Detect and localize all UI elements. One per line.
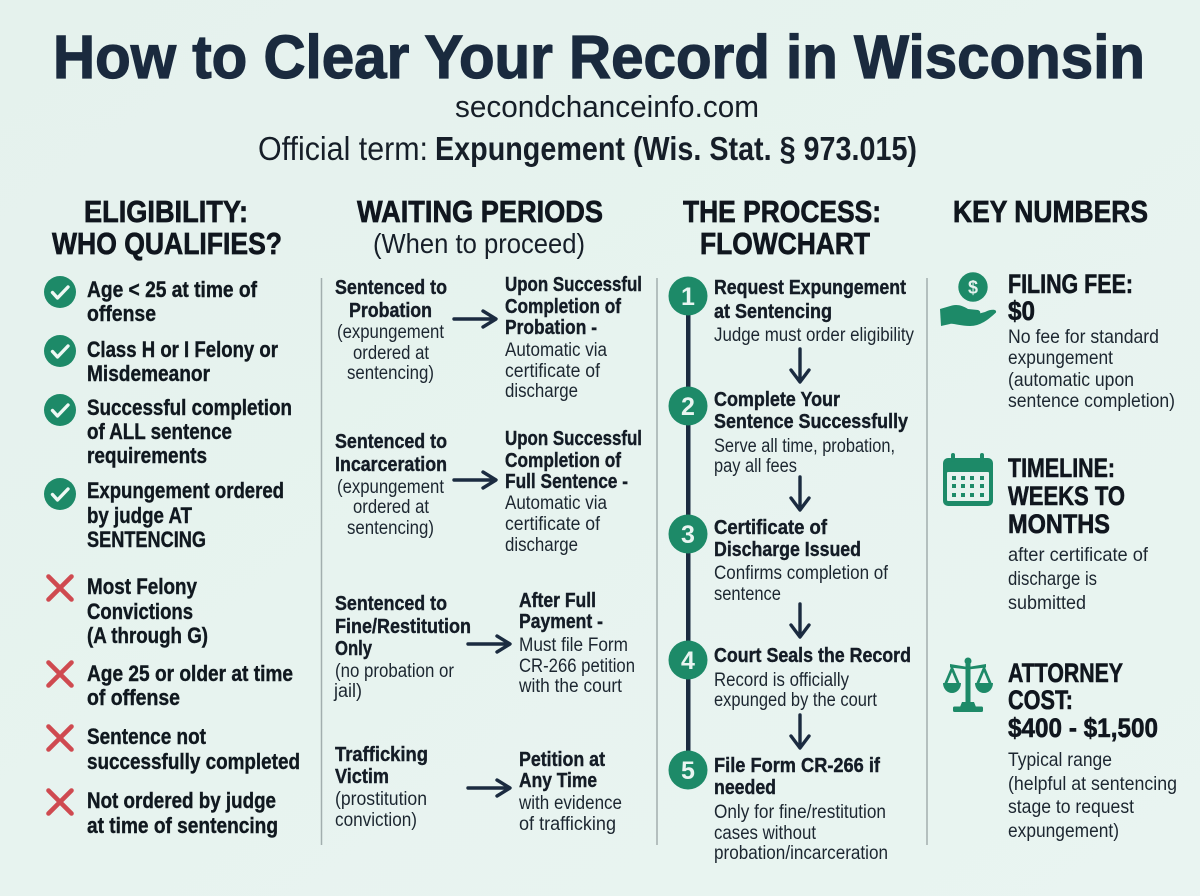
exclusion: age 25 or older bbox=[87, 661, 293, 710]
stat: timeline: submitted bbox=[1008, 592, 1086, 614]
icon: scales of justice bbox=[943, 658, 993, 712]
step 2: Sentence Successfully bbox=[714, 410, 909, 433]
step 1: at Sentencing bbox=[714, 300, 832, 323]
criterion: sentence completion: of ALL sentence bbox=[87, 419, 232, 444]
heading: eligibility: ELIGIBILITY: bbox=[84, 194, 248, 229]
stat: attorney cost: COST: bbox=[1008, 685, 1073, 715]
row: incarceration: Automatic via bbox=[505, 493, 607, 514]
row: fine or restitution: (no probation or bbox=[335, 661, 455, 682]
row: fine or restitution: Payment - bbox=[519, 610, 603, 633]
row: incarceration bbox=[335, 427, 642, 556]
row: trafficking victim: Petition at bbox=[519, 748, 605, 771]
step 3: 3 bbox=[681, 521, 695, 549]
criterion: ordered at sentencing: Expungement ordered bbox=[87, 478, 284, 503]
step 1 bbox=[668, 276, 914, 346]
criterion: felony class bbox=[87, 337, 278, 386]
row: fine or restitution: Sentenced to bbox=[335, 592, 447, 615]
step 5: 5 bbox=[681, 757, 695, 785]
heading: the process: THE PROCESS: bbox=[683, 194, 881, 229]
criterion: ordered at sentencing: SENTENCING bbox=[87, 527, 206, 552]
step 5: File Form CR-266 if bbox=[714, 754, 880, 777]
official term line bbox=[258, 130, 917, 167]
step 5: Only for fine/restitution bbox=[714, 802, 886, 823]
arrow: step 2 to 3 bbox=[791, 477, 809, 510]
step 5: cases without bbox=[714, 823, 817, 844]
stat: timeline: WEEKS TO bbox=[1008, 481, 1125, 511]
exclusion: not ordered by judge: at time of sentencing bbox=[87, 813, 278, 838]
row: probation: discharge bbox=[505, 381, 578, 402]
step 2: pay all fees bbox=[714, 456, 797, 477]
website subtitle: secondchanceinfo.com bbox=[455, 89, 759, 124]
heading: eligibility: WHO QUALIFIES? bbox=[52, 226, 282, 261]
row: incarceration: sentencing) bbox=[347, 518, 434, 539]
stat: filing fee: FILING FEE: bbox=[1008, 269, 1133, 299]
criterion: ordered at sentencing bbox=[87, 478, 284, 552]
stat: filing fee: (automatic upon bbox=[1008, 369, 1134, 391]
arrow: step 4 to 5 bbox=[791, 715, 809, 748]
stat: timeline: TIMELINE: bbox=[1008, 453, 1115, 483]
row: probation: (expungement bbox=[337, 322, 445, 343]
step 4: Court Seals the Record bbox=[714, 644, 911, 667]
criterion: felony class: Misdemeanor bbox=[87, 361, 210, 386]
criterion: age under 25: Age < 25 at time of bbox=[87, 277, 257, 302]
heading: waiting periods: WAITING PERIODS bbox=[357, 194, 603, 229]
criterion: felony class: Class H or I Felony or bbox=[87, 337, 278, 362]
icon: cross bbox=[48, 790, 72, 814]
stat: attorney cost bbox=[1008, 658, 1177, 842]
row: incarceration: certificate of bbox=[505, 514, 601, 535]
row: fine or restitution: Only bbox=[335, 637, 372, 660]
stat: filing fee bbox=[1008, 269, 1175, 412]
stat: filing fee: expungement bbox=[1008, 347, 1114, 369]
step 2: Complete Your bbox=[714, 388, 840, 411]
step 2: Serve all time, probation, bbox=[714, 436, 895, 457]
exclusion: sentence not completed bbox=[87, 724, 300, 774]
step 4: 4 bbox=[681, 647, 695, 675]
step 3: Certificate of bbox=[714, 516, 827, 539]
step 4: Record is officially bbox=[714, 670, 849, 691]
step 1: Request Expungement bbox=[714, 276, 906, 299]
exclusion: not ordered by judge: Not ordered by judge bbox=[87, 788, 276, 813]
row: probation: certificate of bbox=[505, 361, 601, 382]
icon: calendar bbox=[943, 453, 993, 506]
row: incarceration: discharge bbox=[505, 535, 578, 556]
icon: cross bbox=[48, 576, 72, 600]
step 5 bbox=[668, 750, 888, 864]
row: probation bbox=[335, 273, 642, 402]
heading: waiting periods bbox=[357, 194, 603, 259]
criterion: sentence completion: requirements bbox=[87, 443, 207, 468]
step 2 bbox=[668, 386, 909, 477]
step 1: 1 bbox=[681, 283, 695, 311]
row: trafficking victim: (prostitution bbox=[335, 789, 427, 810]
stat: timeline: discharge is bbox=[1008, 568, 1097, 590]
row: trafficking victim: with evidence bbox=[518, 793, 622, 814]
row: fine or restitution: Must file Form bbox=[519, 635, 628, 656]
icon: hand holding coin bbox=[940, 272, 996, 326]
panel: process flowchart bbox=[668, 194, 914, 864]
heading: the process: FLOWCHART bbox=[700, 226, 870, 261]
icon: check bbox=[44, 478, 76, 510]
panel: key numbers bbox=[940, 194, 1177, 842]
row: incarceration: Upon Successful bbox=[505, 427, 642, 450]
exclusion: age 25 or older: of offense bbox=[87, 685, 180, 710]
panel: waiting periods bbox=[333, 194, 642, 835]
icon: hand holding coin: $ bbox=[968, 278, 978, 298]
icon: check bbox=[44, 276, 76, 308]
icon: check bbox=[44, 394, 76, 426]
exclusion: age 25 or older: Age 25 or older at time bbox=[87, 661, 293, 686]
exclusion: most felonies bbox=[87, 574, 208, 648]
stat: timeline bbox=[1008, 453, 1149, 614]
row: fine or restitution: Fine/Restitution bbox=[335, 615, 471, 638]
official term line: Expungement (Wis. Stat. § 973.015) bbox=[435, 130, 917, 167]
stat: attorney cost: stage to request bbox=[1008, 796, 1135, 818]
row: trafficking victim bbox=[335, 743, 622, 835]
row: trafficking victim: Any Time bbox=[519, 769, 597, 792]
step 3 bbox=[668, 514, 889, 605]
stat: attorney cost: (helpful at sentencing bbox=[1008, 773, 1177, 795]
row: probation: Sentenced to bbox=[335, 276, 447, 299]
stat: timeline: MONTHS bbox=[1008, 509, 1110, 539]
stat: filing fee: No fee for standard bbox=[1008, 326, 1159, 348]
row: fine or restitution: jail) bbox=[333, 681, 362, 702]
arrow: step 1 to 2 bbox=[791, 349, 809, 382]
row: probation: Automatic via bbox=[505, 340, 607, 361]
timeline spine bbox=[686, 296, 690, 770]
step 3: Discharge Issued bbox=[714, 538, 861, 561]
row: fine or restitution: CR-266 petition bbox=[519, 656, 635, 677]
icon: cross bbox=[48, 726, 72, 750]
row: fine or restitution: with the court bbox=[518, 676, 623, 697]
heading: key numbers: KEY NUMBERS bbox=[953, 194, 1148, 229]
row: incarceration: (expungement bbox=[337, 477, 445, 498]
criterion: age under 25: offense bbox=[87, 301, 156, 326]
row: incarceration: Full Sentence - bbox=[505, 470, 628, 493]
heading: the process bbox=[683, 194, 881, 261]
row: probation: ordered at bbox=[353, 343, 430, 364]
exclusion: not ordered by judge bbox=[87, 788, 278, 838]
exclusion: most felonies: Convictions bbox=[87, 599, 193, 624]
step 3: sentence bbox=[714, 584, 781, 605]
criterion: age under 25 bbox=[87, 277, 257, 326]
step 5: needed bbox=[714, 776, 776, 799]
row: trafficking victim: Victim bbox=[335, 765, 389, 788]
row: incarceration: Completion of bbox=[505, 449, 621, 472]
row: incarceration: Sentenced to bbox=[335, 430, 447, 453]
step 1: Judge must order eligibility bbox=[714, 325, 914, 346]
title: How to Clear Your Record in Wisconsin bbox=[53, 23, 1145, 91]
row: incarceration: ordered at bbox=[353, 497, 430, 518]
step 3: Confirms completion of bbox=[714, 563, 889, 584]
panel: eligibility bbox=[44, 194, 300, 838]
criterion: sentence completion: Successful completion bbox=[87, 395, 292, 420]
row: trafficking victim: of trafficking bbox=[519, 814, 616, 835]
step 4 bbox=[668, 640, 911, 711]
step 2: 2 bbox=[681, 393, 695, 421]
row: trafficking victim: Trafficking bbox=[335, 743, 428, 766]
row: probation: Completion of bbox=[505, 295, 621, 318]
step 4: expunged by the court bbox=[714, 690, 878, 711]
criterion: ordered at sentencing: by judge AT bbox=[87, 503, 192, 528]
criterion: sentence completion bbox=[87, 395, 292, 468]
stat: filing fee: $0 bbox=[1008, 296, 1035, 326]
row: fine or restitution bbox=[333, 589, 635, 702]
exclusion: most felonies: (A through G) bbox=[87, 623, 208, 648]
row: probation: Probation - bbox=[505, 316, 597, 339]
heading: waiting periods: (When to proceed) bbox=[373, 228, 585, 259]
row: fine or restitution: After Full bbox=[519, 589, 596, 612]
stat: attorney cost: ATTORNEY bbox=[1008, 658, 1123, 688]
row: probation: sentencing) bbox=[347, 363, 434, 384]
stat: attorney cost: Typical range bbox=[1008, 749, 1112, 771]
row: incarceration: Incarceration bbox=[335, 453, 447, 476]
stat: attorney cost: expungement) bbox=[1008, 820, 1119, 842]
official term line: Official term: bbox=[258, 130, 428, 167]
icon: check bbox=[44, 335, 76, 367]
stat: filing fee: sentence completion) bbox=[1008, 390, 1175, 412]
exclusion: sentence not completed: successfully completed bbox=[87, 749, 300, 774]
row: probation: Probation bbox=[349, 299, 432, 322]
stat: timeline: after certificate of bbox=[1008, 544, 1149, 566]
heading: eligibility bbox=[52, 194, 282, 261]
step 5: probation/incarceration bbox=[714, 843, 888, 864]
arrow: step 3 to 4 bbox=[791, 604, 809, 637]
row: trafficking victim: conviction) bbox=[335, 810, 417, 831]
row: probation: Upon Successful bbox=[505, 273, 642, 296]
exclusion: most felonies: Most Felony bbox=[87, 574, 197, 599]
stat: attorney cost: $400 - $1,500 bbox=[1008, 713, 1158, 743]
icon: cross bbox=[48, 662, 72, 686]
exclusion: sentence not completed: Sentence not bbox=[87, 724, 206, 749]
